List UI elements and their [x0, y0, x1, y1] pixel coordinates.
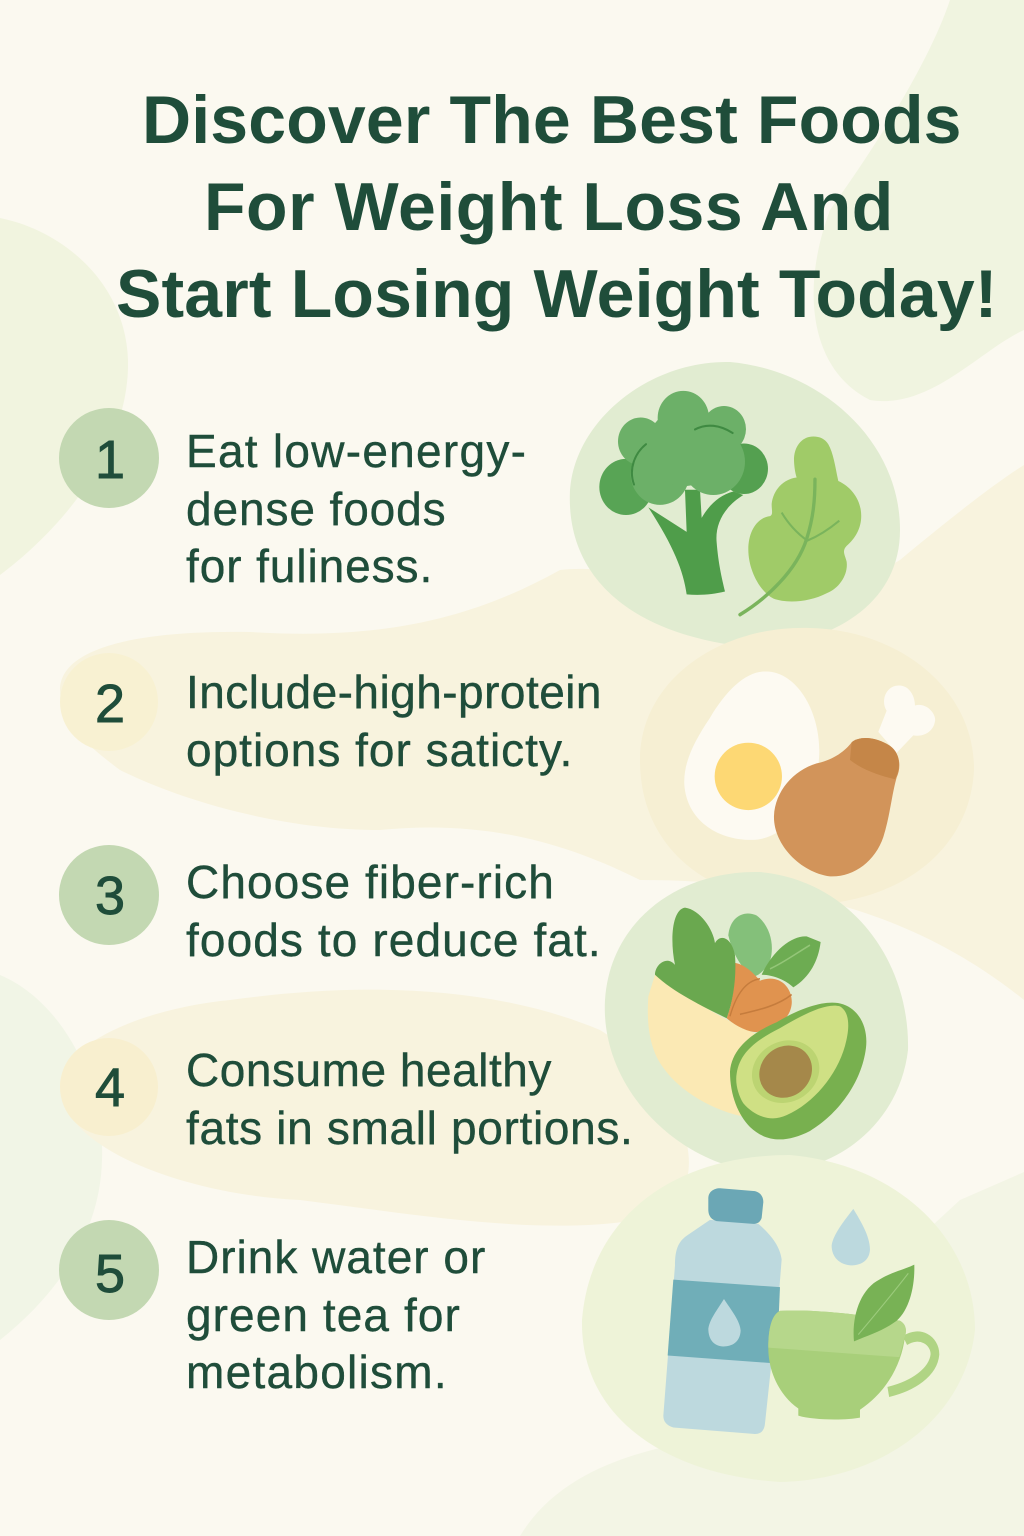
step 2 text: Include-high-protein: [186, 666, 602, 718]
step 4 text: [186, 1044, 633, 1154]
broccoli: [599, 391, 768, 595]
chicken drumstick: [774, 685, 935, 876]
step 1 text: dense foods: [186, 482, 447, 534]
illustration: water bottle and green tea: [582, 1155, 975, 1482]
water drop: [832, 1209, 870, 1265]
step 4 number: 4: [95, 1058, 125, 1118]
step 1 text: for fuliness.: [186, 540, 433, 592]
step 2 text: [186, 666, 602, 776]
step 3 text: [186, 856, 602, 966]
illustration: salad and avocado: [605, 872, 908, 1172]
step 1 number: 1: [95, 430, 125, 490]
step 5 text: metabolism.: [186, 1346, 448, 1398]
step 4 text: fats in small portions.: [186, 1102, 633, 1154]
boiled egg: [684, 671, 819, 840]
step 2 number: 2: [95, 674, 125, 734]
number badges: [59, 408, 159, 1320]
step 5 number: 5: [95, 1244, 125, 1304]
illustration: egg and chicken: [640, 628, 974, 905]
spinach leaf: [740, 436, 861, 615]
title: Start Losing Weight Today!: [116, 256, 998, 332]
step 5 text: Drink water or: [186, 1231, 486, 1283]
step 3 text: Choose fiber-rich: [186, 856, 555, 908]
step 5 text: green tea for: [186, 1288, 461, 1340]
salad bowl: [648, 908, 821, 1117]
step 3 number: 3: [95, 866, 125, 926]
water bottle: [663, 1188, 782, 1434]
green tea cup with leaf: [768, 1265, 935, 1420]
step 3 text: foods to reduce fat.: [186, 914, 602, 966]
illustration: broccoli and leaf: [570, 362, 900, 648]
title: [116, 82, 998, 332]
step 1 text: Eat low-energy-: [186, 425, 527, 477]
title: For Weight Loss And: [204, 169, 894, 245]
step 5 text: [186, 1231, 486, 1398]
title: Discover The Best Foods: [142, 82, 962, 158]
avocado: [730, 1003, 866, 1139]
step 4 text: Consume healthy: [186, 1044, 552, 1096]
step 1 text: [186, 425, 527, 592]
step 2 text: options for saticty.: [186, 724, 573, 776]
